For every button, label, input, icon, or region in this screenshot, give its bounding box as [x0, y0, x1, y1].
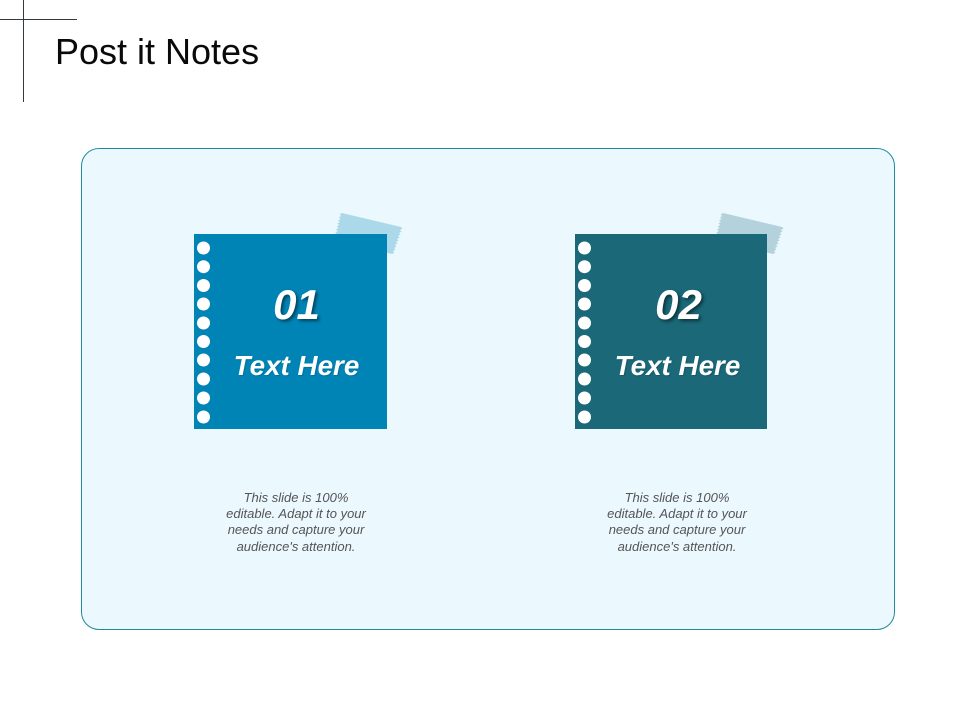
label 1: Text Here — [234, 350, 359, 381]
description 2: audience's attention. — [618, 539, 736, 554]
label 2: Text Here — [615, 350, 740, 381]
number 01: 01 — [273, 281, 320, 328]
description 1 — [226, 490, 366, 554]
description 2: editable. Adapt it to your — [607, 506, 747, 521]
note 2 holes — [578, 242, 591, 424]
tape 1 — [336, 213, 402, 254]
note 1 holes — [197, 242, 210, 424]
description 1: needs and capture your — [228, 522, 364, 537]
description 1: editable. Adapt it to your — [226, 506, 366, 521]
title: Post it Notes — [55, 31, 259, 72]
note 2 — [575, 234, 767, 429]
panel: background — [81, 148, 895, 630]
description 1: audience's attention. — [237, 539, 355, 554]
description 1: This slide is 100% — [244, 490, 348, 505]
description 2: This slide is 100% — [625, 490, 729, 505]
description 2 — [607, 490, 748, 554]
number 02: 02 — [655, 281, 702, 328]
description 2: needs and capture your — [609, 522, 745, 537]
tape 2 — [716, 213, 784, 254]
corner lines — [0, 0, 77, 102]
note 1 — [194, 234, 387, 429]
